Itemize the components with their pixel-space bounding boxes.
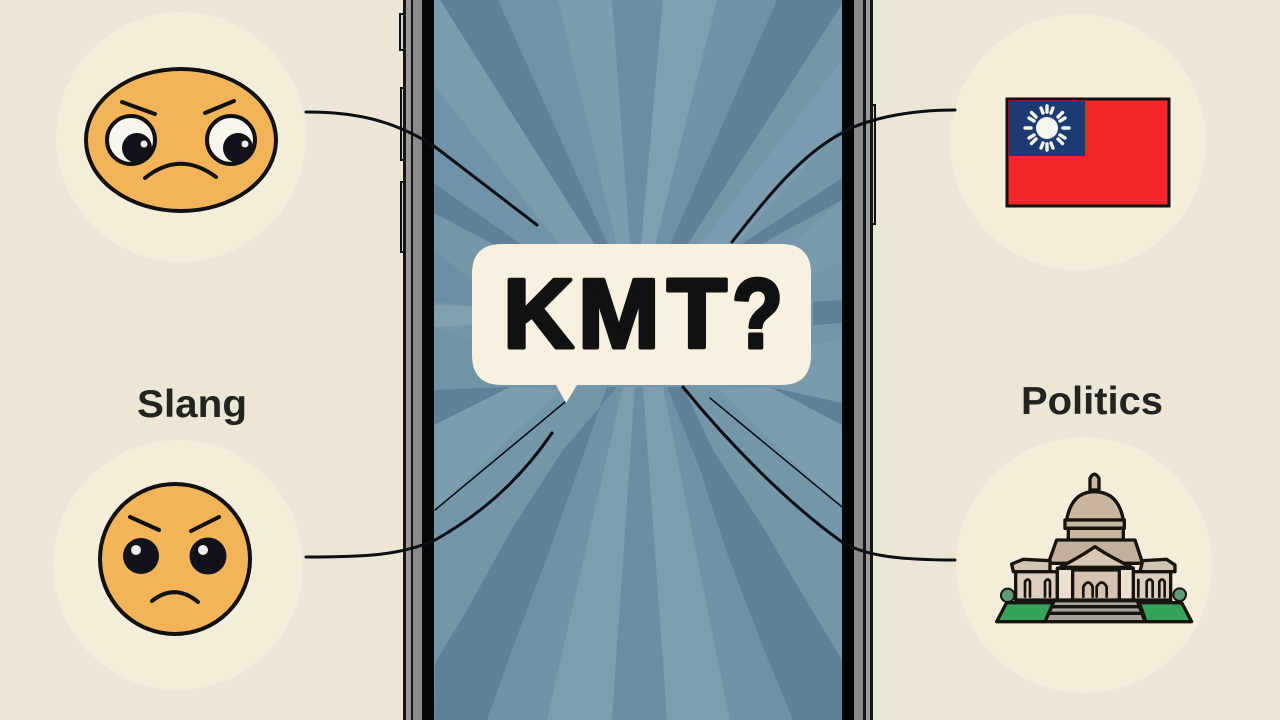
phone screen with sunburst rays bbox=[434, 0, 842, 720]
bubble shape bbox=[472, 244, 811, 403]
wings bbox=[1016, 572, 1057, 600]
stairs bbox=[1045, 601, 1145, 622]
panel: slang bottom circle bbox=[53, 440, 303, 690]
panel: slang top circle bbox=[56, 12, 306, 262]
heading: Slang: Slang bbox=[137, 383, 247, 426]
icon: flag bbox=[1007, 99, 1169, 206]
drum bbox=[1065, 520, 1124, 528]
lawns bbox=[997, 603, 1053, 622]
phone: device body with frame and buttons bbox=[400, 0, 875, 720]
shrubs bbox=[1001, 589, 1014, 602]
dome bbox=[1067, 492, 1123, 520]
lower rays bbox=[434, 387, 842, 720]
connector: bottom left bbox=[306, 433, 552, 557]
connector: thin right bbox=[710, 398, 842, 507]
upper rays bbox=[434, 0, 842, 250]
phone side buttons bbox=[400, 14, 875, 252]
phone frame bbox=[403, 0, 873, 720]
connector: top right bbox=[732, 110, 955, 242]
panel: politics bottom circle bbox=[956, 437, 1212, 693]
panel: politics top circle bbox=[950, 14, 1206, 270]
speech bubble with KMT? bbox=[472, 244, 811, 403]
icon: government building bbox=[997, 474, 1192, 622]
connector lines bbox=[306, 110, 955, 560]
dome finial bbox=[1090, 474, 1099, 490]
icon: confused angry face bbox=[86, 69, 276, 211]
central block bbox=[1057, 568, 1133, 600]
connector: thin left bbox=[435, 402, 565, 510]
bubble text question mark: ? bbox=[732, 260, 783, 369]
upper roof bbox=[1048, 540, 1143, 563]
heading: Politics: Politics bbox=[1021, 380, 1163, 423]
side roofs bbox=[1012, 559, 1050, 572]
pediment bbox=[1060, 547, 1132, 567]
connector: bottom right bbox=[683, 387, 955, 560]
connector: top left bbox=[306, 112, 537, 225]
arches and columns bbox=[1025, 579, 1165, 597]
side rays bbox=[434, 200, 842, 403]
bubble text KMT: KMT bbox=[503, 258, 727, 368]
icon: angry face bbox=[100, 484, 250, 634]
